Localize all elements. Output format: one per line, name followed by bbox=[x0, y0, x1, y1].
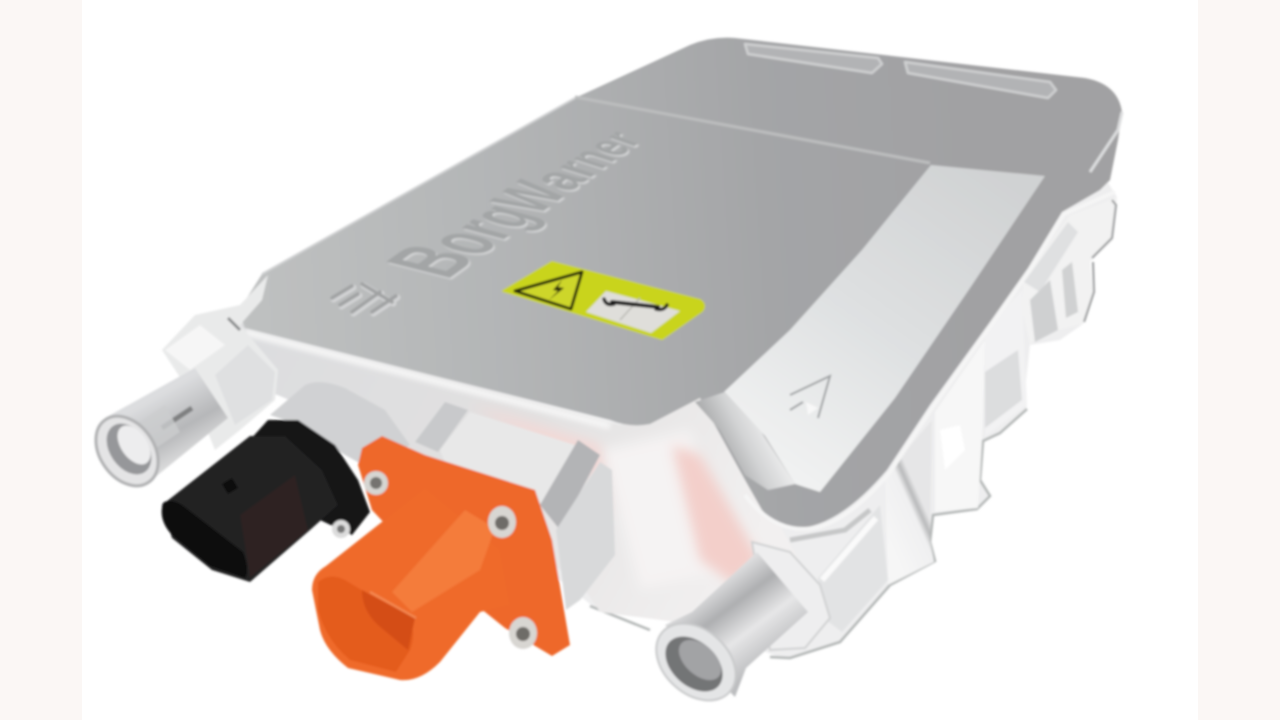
embossed logo mark bbox=[332, 284, 398, 314]
embossed brand name: n bbox=[552, 142, 631, 174]
rim under-shadow bbox=[790, 510, 870, 540]
rib block C bbox=[985, 290, 1027, 437]
plug top ridge bbox=[392, 510, 495, 612]
tube opening interior bbox=[655, 626, 733, 702]
lid corner highlight bbox=[1090, 112, 1122, 172]
embossed arrow bbox=[790, 376, 830, 418]
label background bbox=[503, 262, 704, 339]
flange screw bottom bbox=[509, 617, 537, 649]
embossed brand name: r bbox=[431, 211, 534, 246]
connector mounting flange bbox=[248, 420, 370, 535]
left block fitting bbox=[162, 275, 278, 450]
connector housing behind black plug bbox=[270, 382, 410, 470]
connector lower shading bbox=[240, 475, 308, 578]
lid left edge highlight bbox=[262, 98, 575, 274]
plug inner key bbox=[362, 590, 415, 650]
embossed brand name: g bbox=[449, 197, 554, 235]
front panel between ribs bbox=[440, 412, 575, 505]
raised bar two bbox=[905, 62, 1056, 98]
light recessed strip bbox=[724, 165, 1045, 492]
embossed brand name: W bbox=[474, 174, 585, 220]
connector body bbox=[162, 436, 338, 582]
tube inner detail bbox=[162, 408, 192, 428]
rib block A bbox=[885, 420, 934, 585]
lid panel bbox=[238, 38, 1122, 528]
right side casting ribs bbox=[818, 197, 1117, 632]
left coolant tube bbox=[83, 368, 228, 498]
right background band bbox=[1198, 0, 1280, 720]
embossed brand name: o bbox=[402, 221, 519, 262]
bracket bbox=[1022, 197, 1117, 345]
orange high-voltage connector bbox=[312, 436, 570, 680]
flange screw right bbox=[488, 506, 516, 538]
connector mouth bbox=[162, 501, 247, 578]
lower lid rim highlight bbox=[745, 192, 1115, 529]
pink reflection on front face bbox=[672, 445, 760, 585]
embossed brand name: B bbox=[364, 237, 499, 285]
front rib two bbox=[540, 440, 600, 530]
tube opening rim bbox=[641, 608, 751, 716]
embossed brand name: e bbox=[573, 133, 644, 162]
embossed brand name: r bbox=[535, 153, 614, 183]
body casing silhouette bbox=[240, 170, 1117, 659]
connector latch bbox=[222, 478, 238, 494]
wrench bbox=[604, 299, 667, 310]
warning label bbox=[503, 262, 704, 339]
heater unit bbox=[83, 38, 1122, 716]
embossed brand name: a bbox=[512, 162, 602, 197]
warning triangle bbox=[515, 272, 582, 309]
pink reflection at lid edge bbox=[470, 405, 612, 520]
plug barrel bbox=[312, 488, 510, 680]
side boss beside orange flange bbox=[556, 462, 615, 610]
left background band bbox=[0, 0, 82, 720]
diagonal pipe bbox=[818, 505, 888, 632]
orange flange bbox=[358, 436, 570, 656]
black low-voltage connector bbox=[162, 420, 370, 582]
tube opening bbox=[83, 404, 171, 498]
bright area on right front face bbox=[600, 430, 730, 590]
embossed brand name bbox=[364, 125, 654, 285]
tube barrel bbox=[665, 552, 808, 697]
casing front face bbox=[235, 322, 815, 650]
base flange wire edge bbox=[590, 409, 1027, 658]
manual book bbox=[586, 291, 680, 333]
tube collar bbox=[752, 542, 830, 650]
raised bar one bbox=[745, 44, 882, 73]
lightning bolt bbox=[549, 280, 564, 300]
front rib one bbox=[415, 402, 468, 452]
white highlight along lid front edge bbox=[245, 332, 610, 426]
screw under black connector bbox=[332, 520, 350, 538]
lid crease highlight bbox=[575, 97, 930, 163]
embossed brand name: r bbox=[590, 125, 654, 152]
right coolant tube bbox=[641, 542, 830, 716]
plug mouth bbox=[318, 576, 413, 672]
corner fillet band bbox=[695, 392, 795, 490]
flange screw top bbox=[364, 471, 388, 495]
rib block B bbox=[935, 340, 985, 512]
